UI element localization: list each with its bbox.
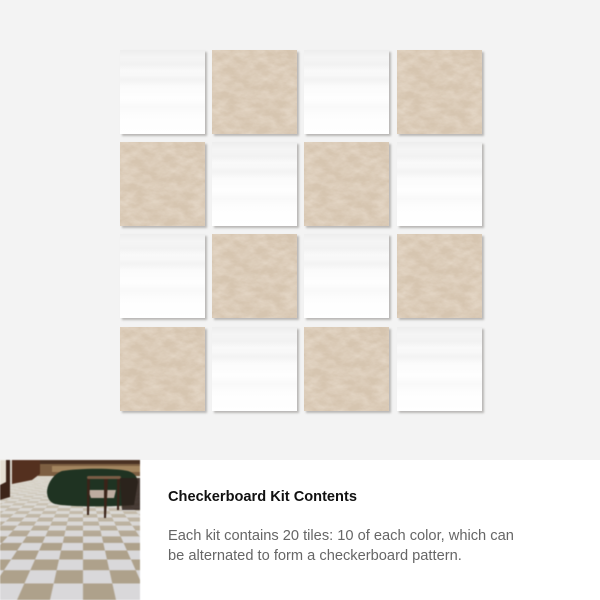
tile: row 3 beige xyxy=(212,234,297,318)
tile: row 2 beige xyxy=(120,142,205,226)
panel: caption xyxy=(0,460,600,600)
tile: row 3 white xyxy=(120,234,205,318)
tile grid xyxy=(120,50,485,414)
tile: row 3 white xyxy=(304,234,389,318)
tile: row 4 white xyxy=(397,327,482,411)
photo: lounge with checkerboard floor xyxy=(0,460,140,600)
tile: row 1 white xyxy=(304,50,389,134)
body text: Each kit contains 20 tiles: 10 of each color, which can xyxy=(168,528,514,544)
tile: row 4 beige xyxy=(120,327,205,411)
body text xyxy=(168,528,514,564)
tile: row 1 white xyxy=(120,50,205,134)
tile: row 1 beige xyxy=(212,50,297,134)
heading: Checkerboard Kit Contents xyxy=(168,489,357,505)
tile: row 2 white xyxy=(212,142,297,226)
body text: be alternated to form a checkerboard pattern. xyxy=(168,548,462,564)
tile: row 4 beige xyxy=(304,327,389,411)
tile: row 4 white xyxy=(212,327,297,411)
tile: row 1 beige xyxy=(397,50,482,134)
tile: row 2 white xyxy=(397,142,482,226)
tile: row 2 beige xyxy=(304,142,389,226)
tile: row 3 beige xyxy=(397,234,482,318)
